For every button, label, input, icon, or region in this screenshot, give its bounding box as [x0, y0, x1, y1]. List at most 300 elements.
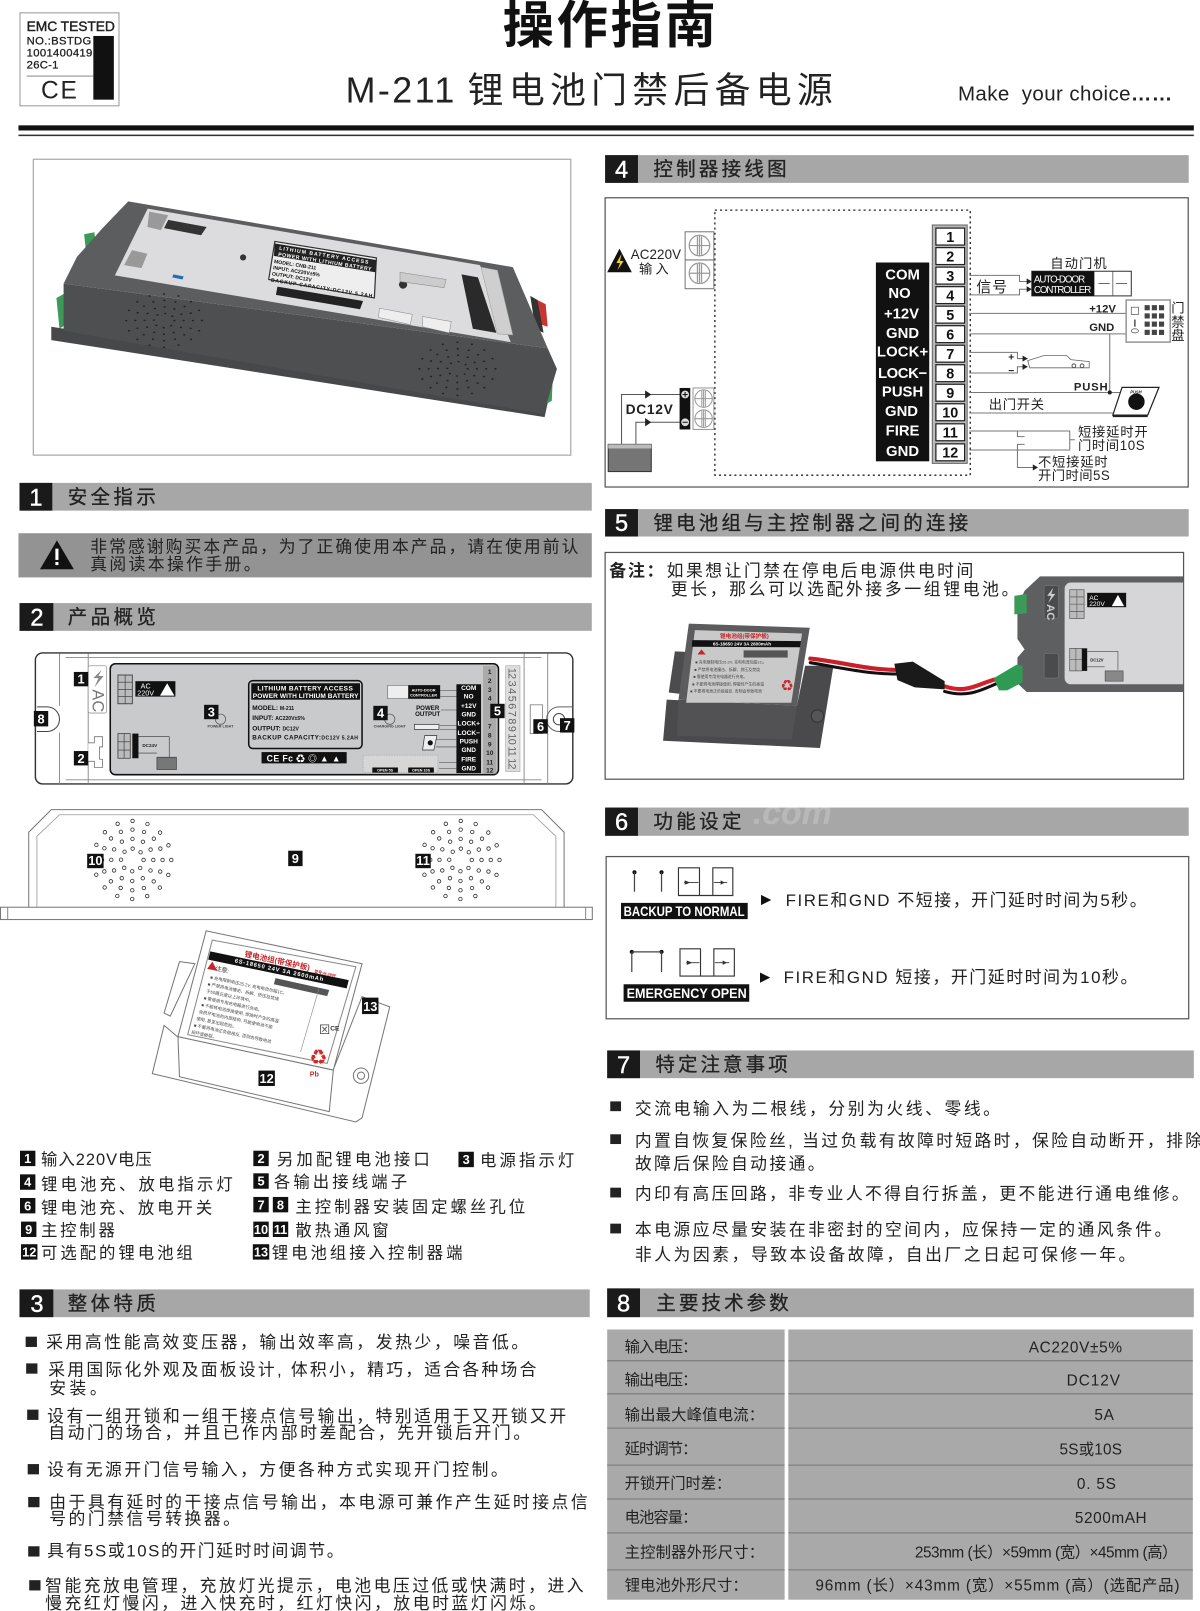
- row: delay: 5S或10S: [1059, 1440, 1122, 1458]
- battery pack photo: ■ 充电限制电压25.2V, 充电电流勿超1C。: [695, 660, 766, 665]
- terminal names: [456, 684, 481, 773]
- row: capacity: 电池容量：: [625, 1509, 697, 1527]
- feature 2: 安装。: [49, 1379, 107, 1398]
- battery pack photo: ■ 严禁将电池撞击、拆解、挤压及焚烧: [694, 667, 760, 672]
- note 4: [610, 1220, 1171, 1265]
- AC input marking: [118, 675, 175, 704]
- row: controller size: 主控制器外形尺寸：: [625, 1544, 764, 1562]
- feature 4: 设有无源开门信号输入，方便各种方式实现开门控制。: [47, 1460, 508, 1479]
- setting: emergency open: EMERGENCY OPEN: [627, 985, 747, 1001]
- legend row 1: 输入220V电压: [41, 1151, 152, 1169]
- terminal block: 7: [946, 347, 954, 363]
- terminal names: [876, 263, 929, 461]
- callout numbers: 3: [208, 705, 215, 720]
- legend row 5: [21, 1244, 463, 1263]
- photo: panel markings: OUTPUT: DC12V: [271, 271, 313, 284]
- barcode: [274, 978, 329, 996]
- feature 3: 设有一组开锁和一组干接点信号输出，特别适用于又开锁又开: [47, 1407, 566, 1426]
- EMC test badge: EMC TESTED: [27, 18, 115, 34]
- section 2 heading: [19, 603, 592, 632]
- legend row 4: 散热通风窗: [295, 1222, 389, 1240]
- legend: [20, 1151, 574, 1263]
- terminal names: GND: [886, 444, 919, 460]
- terminal names: LOCK−: [458, 730, 480, 737]
- section 5 heading: 锂电池组与主控制器之间的连接: [653, 513, 968, 535]
- push button: [989, 381, 1159, 417]
- EMC test badge: 1001400419: [27, 48, 92, 60]
- battery label text: 使用, 甚至出现危险。: [196, 1015, 237, 1030]
- note text: 备注：: [609, 560, 664, 580]
- open 5S 10S switches: OPEN 5S: [377, 769, 394, 773]
- controller end: AC: [1044, 604, 1056, 620]
- diagram: controller side view: [1, 810, 592, 920]
- EMC test badge: 26C-1: [27, 59, 58, 71]
- terminal block: 5: [946, 308, 954, 324]
- note text: 如果想让门禁在停电后电源供电时间: [667, 561, 973, 580]
- model label: INPUT: AC220V±5%: [252, 715, 305, 722]
- keypad: 禁: [1171, 315, 1185, 330]
- legend row 3: 锂电池充、放电开关: [41, 1199, 212, 1217]
- row: delay: [625, 1440, 1122, 1458]
- AC input marking: AC: [141, 682, 151, 690]
- section 1 heading: [19, 483, 592, 511]
- model label: LITHIUM BATTERY ACCESS: [257, 685, 353, 692]
- legend row 1: 电源指示灯: [480, 1152, 574, 1170]
- battery pack photo: ■ 不要将电池正负极接反, 否则会导致电池: [690, 688, 762, 693]
- battery port marking: [118, 734, 176, 770]
- mount hole: [353, 1068, 369, 1083]
- section 6 heading: 功能设定: [653, 811, 742, 833]
- grey panel: [110, 664, 498, 775]
- power light: POWER LIGHT: [208, 724, 234, 728]
- row: peak current: 5A: [1094, 1407, 1115, 1424]
- photo: panel markings: BACKUP CAPACITY:DC12V 5.2AH: [270, 278, 373, 300]
- legend row 1: 1: [24, 1151, 31, 1166]
- note 2: 内置自恢复保险丝, 当过负载有故障时短路时，保险自动断开，排除: [635, 1132, 1200, 1151]
- setting: emergency open: [624, 949, 1137, 1002]
- note 3: 内印有高压回路，非专业人不得自行拆盖，更不能进行通电维修。: [635, 1185, 1189, 1204]
- legend row 4: 主控制器: [41, 1222, 115, 1240]
- header rules: [18, 125, 1194, 136]
- speaker vent right: [422, 821, 499, 899]
- terminal names: FIRE: [886, 424, 920, 440]
- battery label text: 注意:: [215, 964, 230, 975]
- terminal names: NO: [464, 694, 474, 701]
- battery label text: ■ 充电限制电压25.2V, 充电电流勿超1C。: [210, 974, 288, 997]
- terminal block: 4: [946, 289, 954, 305]
- model label: MODEL: M-211: [252, 705, 294, 712]
- lock and push icons: [414, 690, 456, 769]
- terminal block: 11: [943, 426, 958, 442]
- terminal names: GND: [461, 766, 476, 773]
- feature 5: 由于具有延时的干接点信号输出，本电源可兼作产生延时接点信: [49, 1493, 588, 1512]
- cable and connectors: [810, 659, 1023, 694]
- section 4 heading: 4: [615, 158, 628, 184]
- row: input voltage: 输入电压：: [625, 1338, 697, 1356]
- section 6 heading: [605, 808, 1189, 836]
- row: time difference: [625, 1475, 1116, 1493]
- callouts 12 13: 13: [363, 999, 377, 1014]
- section 8 heading: 8: [617, 1291, 630, 1318]
- legend row 1: [20, 1151, 574, 1170]
- terminal names: COM: [885, 267, 920, 283]
- feature 2: 采用国际化外观及面板设计, 体积小，精巧，适合各种场合: [48, 1361, 537, 1380]
- feature 5: [28, 1493, 588, 1529]
- battery pack photo: ♻: [782, 679, 794, 692]
- warning icon on label: [207, 962, 217, 971]
- battery label text: ■ 不能将电池焊接使用, 焊接时产生的高温: [201, 1001, 280, 1025]
- AC input marking: 220V: [137, 690, 154, 698]
- AC220V input: [607, 232, 714, 289]
- battery socket: [88, 737, 103, 767]
- terminal numbers: 7: [488, 723, 492, 730]
- controller end: AC: [1089, 595, 1099, 602]
- watermark: .com: [753, 794, 832, 832]
- battery label text: ■ 需使用专用充电器进行充电。: [203, 994, 263, 1014]
- recycle mark: CE: [330, 1026, 340, 1033]
- keypad: [1089, 300, 1185, 343]
- keypad: 门: [1171, 300, 1185, 315]
- terminal names: PUSH: [882, 385, 923, 401]
- legend row 3: 6: [24, 1198, 31, 1213]
- section 8 heading: [607, 1288, 1194, 1318]
- battery label text: 锂电池组(带保护板): [244, 949, 311, 972]
- row: output voltage: [625, 1371, 1121, 1389]
- callouts 9 10 11: [87, 851, 431, 868]
- model label: POWER WITH LITHIUM BATTERY: [253, 693, 359, 700]
- terminal names: +12V: [884, 306, 919, 323]
- note text: [609, 560, 1018, 599]
- terminal numbers: 4: [488, 696, 492, 703]
- note 2: [610, 1132, 1200, 1174]
- note 2: 故障后保险自动接通。: [635, 1155, 825, 1174]
- note 4: 非人为因素，导致本设备故障，自出厂之日起可保修一年。: [635, 1246, 1135, 1265]
- legend row 5: 锂电池组接入控制器端: [272, 1245, 463, 1263]
- AC silkscreen: [88, 666, 107, 713]
- terminal numbers: [483, 666, 496, 775]
- feature 5: 号的门禁信号转换器。: [49, 1510, 240, 1529]
- terminal names: COM: [461, 685, 477, 692]
- feature 7: 智能充放电管理，充放灯光提示，电池电压过低或快满时，进入: [45, 1576, 584, 1595]
- feature 7: [29, 1576, 584, 1611]
- diagram: controller top view: [34, 653, 574, 784]
- battery pack photo: ■ 不能将电池焊接使用, 焊接时产生的高温: [692, 681, 764, 686]
- terminal names: GND: [886, 326, 919, 342]
- EMC test badge: CE: [41, 78, 77, 105]
- battery label text: 6S-18650 24V 3A 2600mAh: [234, 958, 324, 983]
- callout numbers: 2: [77, 751, 85, 766]
- note text: 更长，那么可以选配外接多一组锂电池。: [671, 580, 1018, 599]
- recycle mark: [310, 1025, 340, 1079]
- terminal names: FIRE: [461, 756, 477, 763]
- terminal block: 6: [946, 328, 954, 344]
- photo: red switch: [530, 296, 548, 333]
- photo: panel markings: [124, 212, 513, 335]
- AC220V input: AC220V: [631, 247, 681, 262]
- safety notice: [18, 533, 592, 577]
- feature 2: [26, 1361, 537, 1398]
- legend row 5: 12: [22, 1245, 36, 1260]
- charging light: [374, 714, 407, 728]
- section 1 heading: 1: [29, 485, 42, 511]
- terminal numbers: 11: [486, 759, 494, 766]
- signal text: 信号: [976, 279, 1007, 296]
- row: capacity: [625, 1509, 1147, 1527]
- row: battery size: [625, 1576, 1179, 1594]
- battery label text: 会损坏电池的内部结构, 可能使电池不能: [198, 1008, 274, 1031]
- push button: 出门开关: [989, 397, 1044, 412]
- photo: panel markings: POWER WITH LITHIUM BATTERY: [278, 252, 372, 273]
- legend row 5: 可选配的锂电池组: [41, 1245, 193, 1263]
- section 2 heading: 2: [30, 606, 43, 632]
- feature 1: 采用高性能高效变压器，输出效率高，发热少，噪音低。: [46, 1333, 528, 1352]
- setting: emergency open: FIRE和GND 短接，开门延时时间为10秒。: [784, 968, 1137, 987]
- section 3 heading: 整体特质: [68, 1293, 156, 1315]
- terminal block: 2: [946, 249, 954, 265]
- terminal numbers: 1: [488, 669, 492, 676]
- keypad: GND: [1089, 322, 1114, 334]
- safety notice: 非常感谢购买本产品，为了正确使用本产品，请在使用前认: [90, 537, 579, 557]
- auto door controller: 自动门机: [1050, 256, 1107, 271]
- auto door mini: [388, 685, 440, 699]
- battery pack photo: [663, 624, 833, 748]
- mount ear right: [547, 707, 572, 732]
- callout numbers: 6: [537, 719, 544, 734]
- row: peak current: 输出最大峰值电流：: [625, 1406, 764, 1424]
- section 3 heading: [19, 1289, 590, 1318]
- battery pack photo: 6S-18650 24V 3A 2600mAh: [713, 642, 771, 647]
- photo: panel markings: INPUT: AC220V±5%: [273, 265, 321, 279]
- note 4: 本电源应尽量安装在非密封的空间内，应保持一定的通风条件。: [635, 1220, 1171, 1239]
- photo: speaker vents: [126, 294, 495, 395]
- specifications table: [607, 1329, 1193, 1600]
- callout numbers: 5: [494, 704, 501, 719]
- feature 6: 具有5S或10S的开门延时时间调节。: [47, 1542, 344, 1561]
- terminal block: 10: [942, 406, 958, 422]
- battery port marking: DC24V: [142, 743, 158, 748]
- legend row 2: 锂电池充、放电指示灯: [41, 1176, 233, 1194]
- subtitle: M-211: [346, 70, 454, 111]
- callout numbers: 8: [37, 711, 45, 726]
- feature list: [26, 1333, 588, 1611]
- power output label: POWER: [416, 705, 440, 712]
- terminal names: NO: [888, 286, 911, 302]
- legend row 3: 7: [257, 1197, 265, 1212]
- callout numbers: 4: [377, 706, 385, 721]
- battery label text: ■ 严禁将电池撞击、拆解、挤压及焚烧: [207, 981, 280, 1003]
- photo: panel markings: MODEL: CNB-211: [274, 259, 317, 272]
- note 1: 交流电输入为二根线，分别为火线、零线。: [635, 1100, 1000, 1119]
- photo: panel markings: LITHIUM BATTERY ACCESS: [279, 246, 369, 266]
- row: output voltage: 输出电压：: [625, 1371, 697, 1389]
- lock: [1008, 353, 1089, 377]
- row: battery size: 锂电池外形尺寸：: [625, 1576, 748, 1594]
- legend row 4: 10: [254, 1222, 268, 1237]
- controller end: [1014, 576, 1183, 692]
- section 4 heading: [605, 155, 1189, 184]
- legend row 3: 主控制器安装固定螺丝孔位: [295, 1198, 525, 1216]
- row: battery size: 96mm (长）×43mm (宽）×55mm (高）(选配产品): [815, 1576, 1179, 1594]
- legend row 3: 8: [277, 1197, 284, 1212]
- certification strip: CE Fc ♻ ◎ ▲ ▲: [267, 753, 341, 763]
- row: output voltage: DC12V: [1067, 1372, 1121, 1389]
- delay notes: 不短接延时: [1038, 453, 1108, 469]
- terminal numbers: 8: [488, 733, 492, 740]
- model label: [249, 681, 362, 748]
- power output label: OUTPUT: [415, 711, 441, 718]
- row: controller size: [625, 1544, 1177, 1562]
- photo: top face: [64, 201, 548, 348]
- EMC test badge: NO.:BSTDG: [27, 36, 91, 48]
- lock: −: [1008, 366, 1014, 377]
- recycle mark: ⊠: [319, 1025, 330, 1037]
- auto door mini: CONTROLLER: [410, 693, 437, 698]
- terminal block: 9: [946, 386, 954, 402]
- battery label text: [191, 941, 339, 1063]
- legend row 1: 另加配锂电池接口: [277, 1151, 430, 1169]
- delay notes: 门时间10S: [1078, 438, 1145, 453]
- terminal block: 1: [946, 230, 954, 246]
- power light: [208, 714, 234, 728]
- terminal names: LOCK+: [458, 720, 480, 727]
- notes list: [610, 1100, 1200, 1265]
- section 8 heading: 主要技术参数: [656, 1292, 789, 1314]
- legend row 2: 各输出接线端子: [274, 1174, 407, 1192]
- terminal block: 12: [942, 446, 958, 462]
- setting: backup to normal: [621, 868, 1147, 919]
- panel: product photo: [33, 159, 571, 455]
- auto door controller: CONTROLLER: [1034, 285, 1091, 296]
- lock: +: [1008, 353, 1014, 364]
- terminal names: GND: [461, 712, 476, 719]
- icon: warning triangle: [40, 540, 74, 569]
- terminal names: GND: [461, 747, 476, 754]
- battery pack photo: ■ 需使用专用充电器进行充电。: [693, 674, 747, 679]
- terminal block: [932, 225, 967, 463]
- callouts 9 10 11: 10: [88, 853, 103, 868]
- section 7 heading: [607, 1050, 1194, 1079]
- row: time difference: 开锁开门时差：: [625, 1475, 731, 1493]
- diagram: battery pack: [152, 931, 390, 1122]
- open 5S 10S switches: OPEN 10S: [412, 769, 431, 773]
- controller end: 220V: [1089, 601, 1105, 608]
- callouts 12 13: 12: [260, 1071, 274, 1086]
- callout numbers: 7: [564, 718, 571, 733]
- push button: PUSH: [1074, 381, 1108, 393]
- terminal numbers: 9: [488, 741, 492, 748]
- battery label text: ■ 不要将电池正负极接反, 否则会导致电池: [193, 1022, 273, 1045]
- mount ear left: [37, 707, 59, 732]
- legend row 4: 11: [274, 1222, 287, 1237]
- battery label text: 于60摄氏度以上环境中。: [206, 988, 254, 1004]
- setting: backup to normal: BACKUP TO NORMAL: [624, 904, 745, 919]
- battery label text: 型号:M-280F: [314, 969, 338, 978]
- callout numbers: [34, 672, 574, 766]
- auto door controller: [1032, 256, 1131, 296]
- section 2 heading: 产品概览: [68, 607, 156, 629]
- row: controller size: 253mm (长）×59mm (宽）×45mm (高）: [915, 1544, 1177, 1562]
- speaker vent left: [93, 821, 171, 899]
- section 7 heading: 7: [617, 1053, 630, 1079]
- callouts 9 10 11: 9: [292, 851, 299, 866]
- section 1 heading: 安全指示: [68, 486, 156, 508]
- legend row 1: 3: [463, 1152, 470, 1167]
- terminal names: +12V: [461, 703, 477, 710]
- photo: silver panel: [115, 209, 511, 342]
- terminal names: LOCK−: [878, 366, 927, 382]
- keypad: 盘: [1171, 327, 1185, 343]
- keypad: +12V: [1089, 303, 1116, 315]
- section 3 heading: 3: [30, 1292, 43, 1318]
- feature 3: [27, 1407, 566, 1442]
- terminal numbers: 3: [488, 687, 492, 694]
- battery label text: 损坏或破裂。: [191, 1029, 217, 1041]
- terminal names: PUSH: [460, 738, 478, 745]
- model label: BACKUP CAPACITY:DC12V 5.2AH: [252, 735, 358, 742]
- panel: extra battery connection: [605, 552, 1184, 779]
- subtitle: 锂电池门禁后备电源: [468, 70, 833, 111]
- row: delay: 延时调节：: [625, 1440, 697, 1458]
- power output label: [415, 705, 441, 718]
- section 5 heading: 5: [615, 511, 628, 537]
- row: capacity: 5200mAH: [1075, 1510, 1147, 1527]
- battery pack photo: 锂电池组(带保护板): [720, 632, 769, 640]
- slogan: Make your choice……: [958, 83, 1172, 106]
- row: peak current: [625, 1406, 1115, 1424]
- section 4 heading: 控制器接线图: [653, 159, 787, 181]
- callout numbers: 1: [77, 672, 85, 687]
- photo: green connectors: [56, 232, 553, 407]
- legend row 2: 4: [24, 1175, 32, 1190]
- terminal numbers: 2: [488, 678, 492, 685]
- signal label: [978, 277, 1009, 294]
- model label: OUTPUT: DC12V: [252, 725, 300, 732]
- legend row 2: 5: [257, 1174, 265, 1189]
- auto door controller: AUTO-DOOR: [1034, 275, 1085, 286]
- callouts 12 13: [258, 998, 378, 1086]
- row: input voltage: [625, 1338, 1122, 1357]
- section 7 heading: 特定注意事项: [655, 1054, 788, 1076]
- label divider: [301, 988, 319, 1052]
- legend row 4: [21, 1222, 389, 1240]
- row: input voltage: AC220V±5%: [1029, 1340, 1122, 1357]
- delay notes: [1038, 424, 1148, 483]
- terminal block: 3: [946, 269, 954, 285]
- terminal block: 8: [946, 367, 954, 383]
- safety notice: 真阅读本操作手册。: [90, 555, 261, 574]
- EMC test badge: [20, 13, 119, 106]
- recycle mark: ♻: [311, 1048, 327, 1066]
- rotated terminal numbers: 12 3 4 5 6 7 8 9 10 11 12: [506, 668, 518, 770]
- output wires: [969, 275, 1126, 467]
- row: time difference: 0. 5S: [1077, 1476, 1116, 1493]
- auto door mini: AUTO-DOOR: [412, 687, 436, 692]
- terminal names: GND: [885, 404, 918, 420]
- open 5S 10S switches: [363, 755, 438, 773]
- photo: base lip: [51, 327, 548, 417]
- delay notes: 开门时间5S: [1038, 468, 1110, 483]
- DC12V input: DC12V: [626, 401, 674, 417]
- section 6 heading: 6: [615, 810, 628, 836]
- terminal names: LOCK+: [877, 345, 929, 361]
- DC12V input: [608, 388, 714, 472]
- legend row 4: 9: [25, 1222, 32, 1237]
- wire arrows: [1023, 278, 1112, 471]
- legend row 1: 2: [257, 1151, 265, 1166]
- section 5 heading: [605, 509, 1189, 537]
- controller end: DC12V: [1090, 658, 1104, 663]
- legend row 3: [20, 1197, 525, 1217]
